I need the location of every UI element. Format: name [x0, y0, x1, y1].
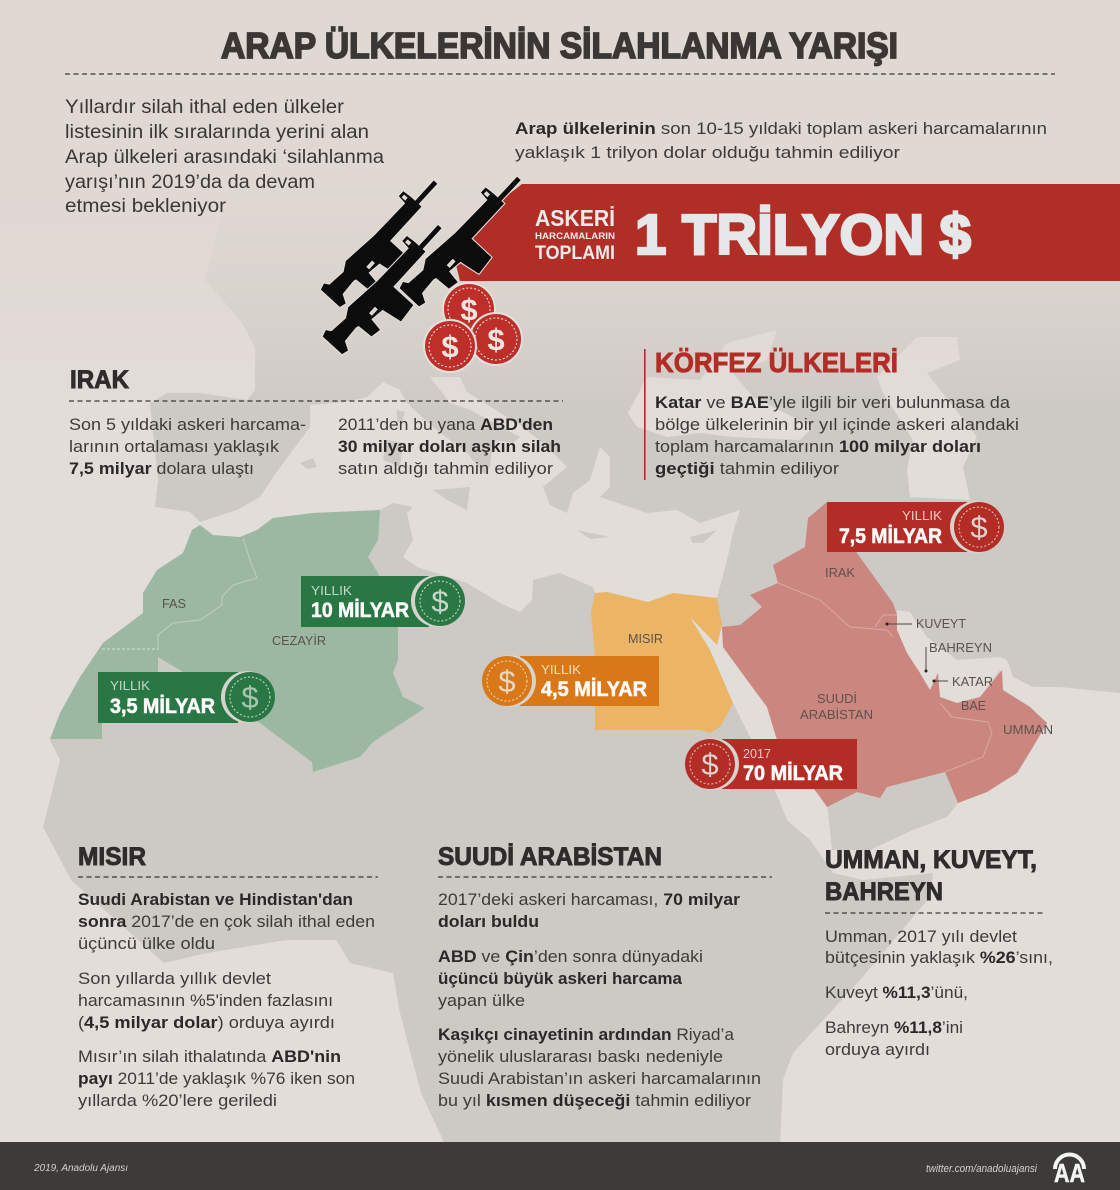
intro text [65, 97, 384, 217]
panel: Saudi Arabia: üçüncü büyük askeri harcama [438, 969, 683, 988]
panel: Egypt: harcamasının %5'inden fazlasını [78, 991, 333, 1010]
banner: total spending [450, 184, 1120, 281]
intro text: yarışı’nın 2019’da da devam [65, 172, 315, 193]
panel: Saudi Arabia: SUUDİ ARABİSTAN [438, 843, 662, 871]
top summary text [515, 119, 1047, 162]
panel: Saudi Arabia: 2017’deki askeri harcaması, 70 milyar [438, 890, 740, 909]
map labels: CEZAYİR [272, 634, 326, 648]
map labels: FAS [162, 597, 186, 611]
panel: Saudi Arabia: Suudi Arabistan’ın askeri harcamalarının [438, 1069, 761, 1088]
icon: rifles [317, 166, 545, 369]
country: Morocco, Western Sahara and Algeria [50, 510, 425, 772]
panel: Oman, Kuwait, Bahrain: Bahreyn %11,8’ini [825, 1018, 963, 1037]
panel: Egypt: sonra 2017’de en çok silah ithal eden [78, 912, 375, 931]
panel: Oman, Kuwait, Bahrain: UMMAN, KUVEYT, [825, 846, 1037, 874]
icon: coins: $ [441, 329, 459, 364]
badge: Iraq 7.5 billion: YILLIK [902, 508, 942, 523]
panel: Oman, Kuwait, Bahrain: orduya ayırdı [825, 1040, 930, 1059]
panel: Egypt: Son yıllarda yıllık devlet [78, 969, 271, 988]
map labels: ARABİSTAN [800, 708, 873, 722]
panel: Egypt: MISIR [78, 843, 146, 871]
badge: Egypt 4.5 billion: 4,5 MİLYAR [541, 678, 647, 701]
panel: Iraq: satın aldığı tahmin ediliyor [338, 459, 553, 478]
map labels: MISIR [628, 632, 663, 646]
icon: coins [424, 283, 522, 372]
panel: Egypt: üçüncü ülke oldu [78, 934, 215, 953]
panel: Iraq: Son 5 yıldaki askeri harcama- [69, 415, 306, 434]
banner: total spending: 1 TRİLYON $ [635, 203, 971, 267]
intro text: etmesi bekleniyor [65, 196, 227, 217]
map labels: KATAR [952, 675, 993, 689]
country: Egypt [591, 592, 733, 733]
panel: Egypt: payı 2011’de yaklaşık %76 iken son [78, 1069, 355, 1088]
map labels: BAE [961, 699, 986, 713]
badge: Algeria 10 billion: $ [431, 584, 449, 619]
panel: Gulf countries [644, 347, 1019, 480]
panel: Egypt: (4,5 milyar dolar ) orduya ayırdı [78, 1013, 335, 1032]
badge: Saudi Arabia 70 billion: $ [701, 747, 719, 782]
intro text: Yıllardır silah ithal eden ülkeler [65, 97, 345, 118]
banner: total spending: TOPLAMI [535, 242, 615, 264]
intro text: listesinin ilk sıralarında yerini alan [65, 122, 369, 143]
panel: Saudi Arabia: yönelik uluslararası baskı nedeniyle [438, 1047, 723, 1066]
badge: Iraq 7.5 billion: $ [970, 510, 988, 545]
badge: Saudi Arabia 70 billion: 70 MİLYAR [743, 762, 843, 785]
icon: coins: $ [460, 292, 478, 327]
panel: Iraq: 2011’den bu yana ABD'den [338, 415, 553, 434]
intro text: Arap ülkeleri arasındaki ‘silahlanma [65, 147, 384, 168]
badge: Algeria 10 billion: 10 MİLYAR [311, 599, 409, 622]
panel: Oman, Kuwait, Bahrain: bütçesinin yaklaşık %26’sını, [825, 948, 1053, 967]
panel: Iraq: larının ortalaması yaklaşık [69, 437, 280, 456]
top summary text: Arap ülkelerinin son 10-15 yıldaki toplam askeri harcamalarının [515, 119, 1047, 138]
badge: Egypt 4.5 billion [482, 655, 659, 707]
panel: Saudi Arabia: ABD ve Çin’den sonra dünyadaki [438, 947, 703, 966]
panel: Egypt: Suudi Arabistan ve Hindistan'dan [78, 890, 353, 909]
badge: Algeria 10 billion: YILLIK [311, 583, 352, 598]
panel: Iraq [69, 366, 563, 478]
map labels: UMMAN [1003, 723, 1053, 737]
footer: twitter.com/anadoluajansi [926, 1163, 1037, 1175]
badge: Morocco 3.5 billion: $ [241, 680, 259, 715]
title: ARAP ÜLKELERİNİN SİLAHLANMA YARIŞI [221, 25, 898, 66]
panel: Saudi Arabia [438, 843, 772, 1110]
badge: Egypt 4.5 billion: $ [498, 664, 516, 699]
panel: Oman, Kuwait, Bahrain: Kuveyt %11,3’ünü, [825, 983, 968, 1002]
panel: Oman, Kuwait, Bahrain: BAHREYN [825, 878, 943, 906]
panel: Iraq: IRAK [70, 366, 129, 394]
badge: Saudi Arabia 70 billion: 2017 [743, 746, 771, 761]
panel: Iraq: 7,5 milyar dolara ulaştı [69, 459, 254, 478]
panel: Egypt: Mısır’ın silah ithalatında ABD'nin [78, 1047, 341, 1066]
badge: Morocco 3.5 billion [98, 671, 275, 723]
banner: total spending: HARCAMALARIN [535, 231, 615, 242]
countries: Gulf region [722, 502, 1047, 807]
badge: Algeria 10 billion [301, 575, 465, 627]
badge: Egypt 4.5 billion: YILLIK [541, 662, 581, 677]
map labels: KUVEYT [916, 617, 966, 631]
banner: total spending: ASKERİ [535, 205, 615, 231]
badge: Saudi Arabia 70 billion [685, 738, 857, 790]
panel: Egypt [78, 843, 378, 1110]
panel: Oman, Kuwait, Bahrain: Umman, 2017 yılı devlet [825, 927, 1017, 946]
panel: Oman, Kuwait, Bahrain [825, 846, 1053, 1059]
panel: Gulf countries: KÖRFEZ ÜLKELERİ [655, 347, 898, 378]
badge: Morocco 3.5 billion: YILLIK [110, 678, 150, 693]
footer [0, 1142, 1120, 1190]
panel: Saudi Arabia: yapan ülke [438, 991, 525, 1010]
map labels: SUUDİ [817, 692, 857, 706]
badge: Iraq 7.5 billion: 7,5 MİLYAR [839, 525, 942, 548]
panel: Iraq: 30 milyar doları aşkın silah [338, 437, 561, 456]
panel: Gulf countries: Katar ve BAE’yle ilgili bir veri bulunmasa da [655, 393, 1011, 412]
panel: Gulf countries: geçtiği tahmin ediliyor [655, 459, 839, 478]
map labels: BAHREYN [929, 641, 992, 655]
map labels: IRAK [825, 566, 856, 580]
panel: Egypt: yıllarda %20’lere geriledi [78, 1091, 277, 1110]
panel: Gulf countries: toplam harcamalarının 100 milyar doları [655, 437, 981, 456]
panel: Gulf countries: bölge ülkelerinin bir yıl içinde askeri alandaki [655, 415, 1019, 434]
panel: Saudi Arabia: doları buldu [438, 912, 539, 931]
badge: Morocco 3.5 billion: 3,5 MİLYAR [110, 695, 215, 718]
panel: Saudi Arabia: Kaşıkçı cinayetinin ardından Riyad’a [438, 1025, 735, 1044]
map labels [162, 566, 1053, 737]
footer: 2019, Anadolu Ajansı [33, 1163, 128, 1174]
icon: coins: $ [487, 322, 505, 357]
panel: Saudi Arabia: bu yıl kısmen düşeceği tahmin ediliyor [438, 1091, 751, 1110]
badge: Iraq 7.5 billion [827, 501, 1004, 553]
top summary text: yaklaşık 1 trilyon dolar olduğu tahmin ediliyor [515, 143, 900, 162]
footer: AA [1054, 1158, 1085, 1188]
